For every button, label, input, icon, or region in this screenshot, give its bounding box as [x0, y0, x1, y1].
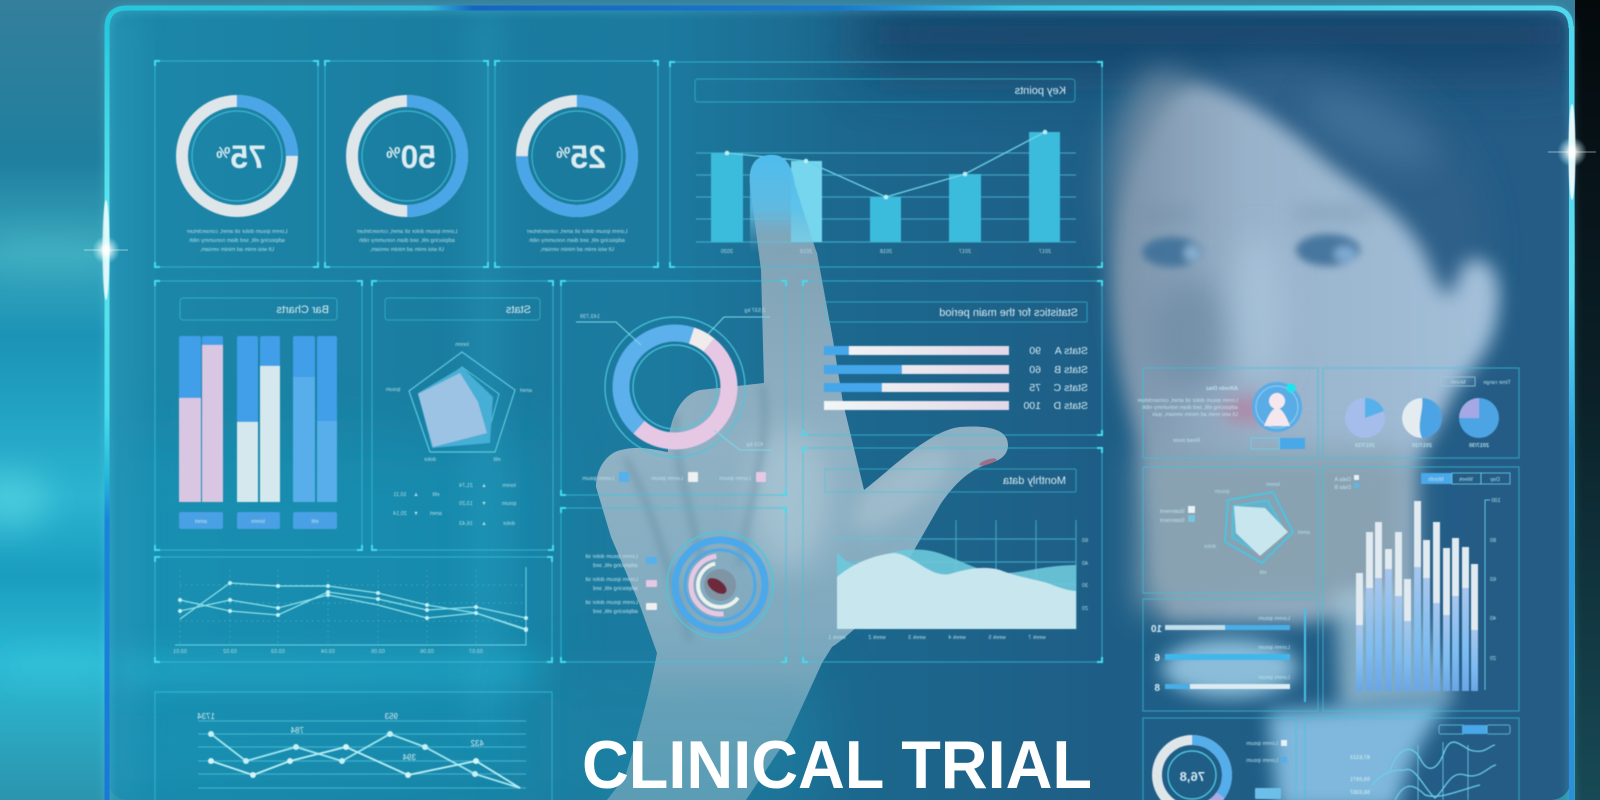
values and labels: 60 [1029, 364, 1041, 376]
stacked bars [179, 336, 337, 502]
year labels: 2019 [800, 249, 812, 255]
radar [1225, 492, 1293, 563]
point labels [197, 712, 484, 762]
panel: lower line chart [155, 692, 552, 800]
meter values [1150, 624, 1162, 694]
meter values: 8 [1154, 683, 1160, 694]
radar legend: 20,14 [393, 511, 407, 517]
gauge value: 76,8 [1180, 769, 1205, 784]
legend text: Lorem ipsum dolor sit [585, 577, 638, 583]
wave stats: 59,0971 [1350, 777, 1370, 783]
axis labels: 60 [1082, 538, 1088, 544]
caption: Ut wisi enim ad minim veniam, [199, 247, 274, 253]
radar legend: 21,74 [459, 483, 473, 489]
area chart [837, 550, 1076, 629]
header [385, 298, 540, 320]
axis labels: week 4 [948, 635, 967, 641]
panel: concentric rings [561, 508, 786, 662]
fingertip overlay [750, 155, 817, 253]
background: outside right dark area [1575, 0, 1600, 800]
axis labels [828, 538, 1088, 641]
panel: pies [1323, 368, 1519, 458]
callouts [576, 317, 772, 450]
legend: Lorem ipsum [719, 476, 751, 482]
buttons [179, 512, 337, 529]
panel: statistics for the main period [803, 281, 1102, 435]
panel: 50 percent [325, 61, 488, 267]
caption: Lorem ipsum dolor sit amet, consectetuer [526, 229, 627, 235]
meters [1165, 625, 1290, 689]
axis labels: week 2 [868, 635, 887, 641]
axis labels [1490, 498, 1501, 662]
point labels: 432 [470, 739, 484, 748]
callout labels [580, 308, 766, 448]
text: adipiscing elit, sed diam nonummy nibh [1142, 405, 1238, 411]
thumb nail tint [979, 457, 997, 467]
frame: right edge [1569, 26, 1574, 800]
panel: donut [561, 281, 786, 495]
radar legend: ipsum [501, 501, 516, 507]
hair highlight [1316, 96, 1425, 164]
legend: Statement [1159, 518, 1185, 524]
gauge legend: Lorem ipsum [1246, 758, 1278, 764]
blurred woman: hair, face, neck [1110, 62, 1499, 800]
radar legend: dolor [503, 521, 515, 527]
tabs: Day [1490, 477, 1500, 483]
header [825, 302, 1087, 322]
radar labels: dolor [424, 457, 436, 463]
radar legend: ▼ [481, 501, 487, 507]
axis labels: 30 [1082, 583, 1088, 589]
caption: adipiscing elit, sed diam nonummy nibh [189, 238, 285, 244]
point labels: 953 [384, 712, 398, 721]
legend text: Lorem ipsum dolor sit [585, 600, 638, 606]
left eye [1142, 237, 1202, 267]
radar legend: ▼ [413, 511, 419, 517]
neck [1335, 590, 1455, 710]
panel: profile [1137, 368, 1318, 458]
value: 25 [570, 139, 606, 175]
ring 25 [522, 101, 632, 211]
panel: horizontal meters [1143, 599, 1318, 711]
tick labels: 03.06 [420, 649, 434, 655]
callout labels: 2,537 kg [744, 308, 766, 314]
radar labels: lorem [1266, 482, 1280, 488]
wave tabs [1439, 725, 1510, 734]
legend text: adipiscing elit, sed [593, 609, 638, 615]
text: Ut wisi enim ad minim veniam, quis [1152, 412, 1238, 418]
header [825, 469, 1076, 492]
value: % [556, 145, 570, 162]
callout labels: 415 kg [747, 442, 763, 448]
wave lines [1372, 742, 1496, 800]
tabs [1421, 473, 1510, 484]
radar legend: lorem [502, 483, 516, 489]
radar legend: 10,11 [393, 492, 407, 498]
header [180, 298, 337, 320]
panel: key points [670, 62, 1102, 267]
buttons: amet [194, 519, 207, 525]
tabs: Week [1459, 477, 1473, 483]
text: Lorem ipsum dolor sit amet, consectetuer [1137, 398, 1238, 404]
point labels: 394 [402, 753, 416, 762]
legend text: adipiscing elit, sed [593, 586, 638, 592]
tick labels: 03.04 [321, 649, 335, 655]
wave grid [1418, 742, 1468, 800]
dashboard panels [155, 61, 1519, 800]
header: Time range [1483, 380, 1511, 386]
panel: tall bar chart [1323, 467, 1519, 711]
radar legend: 16,43 [459, 521, 473, 527]
radar legend: 13,20 [459, 501, 473, 507]
tick labels: 03.02 [223, 649, 237, 655]
panel: waves [1305, 718, 1519, 800]
grid [837, 520, 1076, 629]
values and labels: Stats C [1053, 382, 1088, 394]
panel: small radar [1143, 467, 1318, 593]
buttons: elit [311, 519, 319, 525]
eyebrows [1302, 205, 1364, 221]
pie labels: 2017/30 [1469, 443, 1489, 449]
caption: adipiscing elit, sed diam nonummy nibh [529, 238, 625, 244]
legend: Lorem ipsum [582, 476, 614, 482]
text [1137, 386, 1238, 444]
axis labels: 20 [1082, 606, 1088, 612]
buttons [1251, 438, 1305, 449]
background: outside glow blobs [0, 240, 100, 677]
lower face grey [1140, 450, 1410, 610]
callout labels: 143,739 [580, 314, 600, 320]
panel: monthly data [803, 448, 1102, 662]
gridlines [198, 721, 526, 788]
axis labels: week 5 [988, 635, 1007, 641]
frame: top edge [107, 8, 1571, 28]
values and labels [1023, 345, 1088, 412]
radar chart [409, 352, 515, 452]
header: Stats [505, 304, 531, 316]
series B [208, 744, 520, 788]
tick labels [173, 649, 483, 655]
hand pointing at screen [596, 155, 1008, 800]
value: 75 [230, 139, 266, 175]
caption [526, 229, 627, 253]
value: % [386, 145, 400, 162]
markers [178, 581, 528, 632]
flare: right frame [1548, 104, 1596, 200]
meter labels [1258, 616, 1290, 681]
axis labels: week 7 [1028, 635, 1047, 641]
legend text: adipiscing elit, sed [593, 563, 638, 569]
axis labels: week 3 [908, 635, 927, 641]
value: 50 [400, 139, 436, 175]
panel: gauge [1143, 718, 1296, 800]
radar labels: elit [1259, 570, 1267, 576]
avatar [1252, 382, 1302, 432]
caption: Lorem ipsum dolor sit amet, consectetuer [186, 229, 287, 235]
panel: bar charts [155, 281, 362, 550]
caption: adipiscing elit, sed diam nonummy nibh [359, 238, 455, 244]
legend text: Lorem ipsum dolor sit [585, 554, 638, 560]
meter labels: Lorem ipsum [1258, 645, 1290, 651]
buttons: lorem [251, 519, 265, 525]
text: Alfredo Díaz [1206, 386, 1238, 392]
caption [356, 229, 457, 253]
tick labels: 03.07 [469, 649, 483, 655]
frame: left edge [104, 26, 110, 800]
tabs: Month [1428, 477, 1444, 483]
radar labels [1204, 482, 1310, 576]
header: Monthly data [1002, 475, 1066, 487]
caption [186, 229, 287, 253]
radar labels: lorem [455, 342, 469, 348]
tick labels: 03.05 [371, 649, 385, 655]
legend [1334, 475, 1359, 491]
donut chart [605, 317, 745, 457]
pie labels: 2017/20 [1412, 443, 1432, 449]
header: Month [1450, 380, 1466, 386]
radar labels: amet [1297, 530, 1310, 536]
ring [1157, 740, 1227, 800]
caption: Ut wisi enim ad minim veniam, [539, 247, 614, 253]
year labels: 2018 [880, 249, 892, 255]
side line [1304, 608, 1306, 702]
values and labels: 100 [1023, 400, 1041, 412]
meter labels: Lorem ipsum [1258, 616, 1290, 622]
trend line [725, 130, 1047, 199]
year labels [721, 249, 1051, 255]
tick labels: 03.01 [173, 649, 187, 655]
mouth tint [1221, 396, 1273, 424]
radar legend: elit [432, 492, 440, 498]
header: Key points [1014, 85, 1066, 97]
pie labels [1355, 443, 1489, 449]
bars [1356, 501, 1478, 691]
hand shading [624, 386, 946, 764]
header: Statistics for the main period [939, 307, 1078, 319]
axis labels: 40 [1490, 616, 1496, 622]
radar legend: amet [429, 511, 442, 517]
panel: 75 percent [155, 61, 318, 267]
radar labels: dolor [1204, 544, 1216, 550]
radar legend [393, 483, 516, 527]
wave stats [1350, 755, 1370, 796]
legend text [585, 554, 638, 615]
tick labels: 03.03 [271, 649, 285, 655]
meter values: 10 [1150, 624, 1162, 635]
caption: Ut wisi enim ad minim veniam, [369, 247, 444, 253]
year labels: 2017 [959, 249, 971, 255]
radar labels [385, 342, 532, 463]
wave stats: 87,6123 [1350, 755, 1370, 761]
pie 1 [1345, 398, 1385, 438]
ring 50 [352, 101, 462, 211]
radar labels: ipsum [1214, 489, 1229, 495]
pie 3 [1459, 398, 1499, 438]
meter values: 6 [1154, 653, 1160, 664]
legend: Data A [1334, 477, 1351, 483]
collar [1162, 638, 1298, 698]
nose highlight [1226, 250, 1279, 372]
axes [175, 567, 526, 645]
gauge legend: Lorem ipsum [1246, 741, 1278, 747]
radar labels: elit [493, 457, 501, 463]
values and labels: Stats D [1053, 400, 1088, 412]
legend squares [646, 557, 657, 610]
axis labels: 20 [1490, 656, 1496, 662]
point labels: 784 [290, 726, 304, 735]
hair [1202, 56, 1482, 278]
header [695, 79, 1075, 102]
radar labels: ipsum [385, 387, 400, 393]
radar legend: ▲ [413, 492, 419, 498]
legend [1159, 506, 1195, 524]
pie 2 [1402, 398, 1442, 438]
forehead left shade [1110, 70, 1220, 310]
axis labels: 40 [1082, 561, 1088, 567]
flare: left frame [84, 200, 128, 300]
right eye [1296, 234, 1360, 266]
wave stats: 58,0387 [1350, 790, 1370, 796]
values and labels: 75 [1029, 382, 1041, 394]
axis labels: 80 [1490, 538, 1496, 544]
axis labels: week 1 [828, 635, 847, 641]
panel: 25 percent [495, 61, 658, 267]
radar legend: ▲ [481, 521, 487, 527]
dotted grid [180, 570, 526, 645]
value: % [216, 145, 230, 162]
point labels: 1734 [197, 712, 215, 721]
face [1112, 85, 1499, 620]
year labels: 2020 [721, 249, 733, 255]
axis labels: 100 [1491, 498, 1501, 504]
year labels: 2017 [1039, 249, 1051, 255]
three lines [180, 583, 526, 630]
cheek shadow [1148, 277, 1232, 393]
radar legend: ▲ [481, 483, 487, 489]
progress bars [824, 346, 1009, 410]
shirt [1268, 700, 1450, 800]
ring 75 [182, 101, 292, 211]
series A [208, 731, 520, 788]
gridlines [696, 153, 1076, 242]
axis [1485, 500, 1490, 690]
caption: Lorem ipsum dolor sit amet, consectetuer [356, 229, 457, 235]
header [1441, 377, 1511, 386]
meter labels: Lorem ipsum [1258, 675, 1290, 681]
legend: Statement [1159, 509, 1185, 515]
legend: Data B [1334, 485, 1351, 491]
legend [582, 472, 766, 482]
bars [711, 132, 1060, 242]
values and labels: 90 [1029, 345, 1041, 357]
values and labels: Stats A [1055, 345, 1088, 357]
panel: line chart [155, 557, 552, 662]
legend: Lorem ipsum [651, 476, 683, 482]
header: Bar Charts [276, 304, 329, 316]
pie labels: 2017/10 [1355, 443, 1375, 449]
axis labels: 60 [1490, 577, 1496, 583]
concentric ring chart [667, 532, 773, 638]
gauge legend [1246, 740, 1287, 799]
text: Read more [1173, 438, 1200, 444]
panel: stats radar [372, 281, 553, 550]
values and labels: Stats B [1054, 364, 1088, 376]
radar labels: amet [519, 388, 532, 394]
